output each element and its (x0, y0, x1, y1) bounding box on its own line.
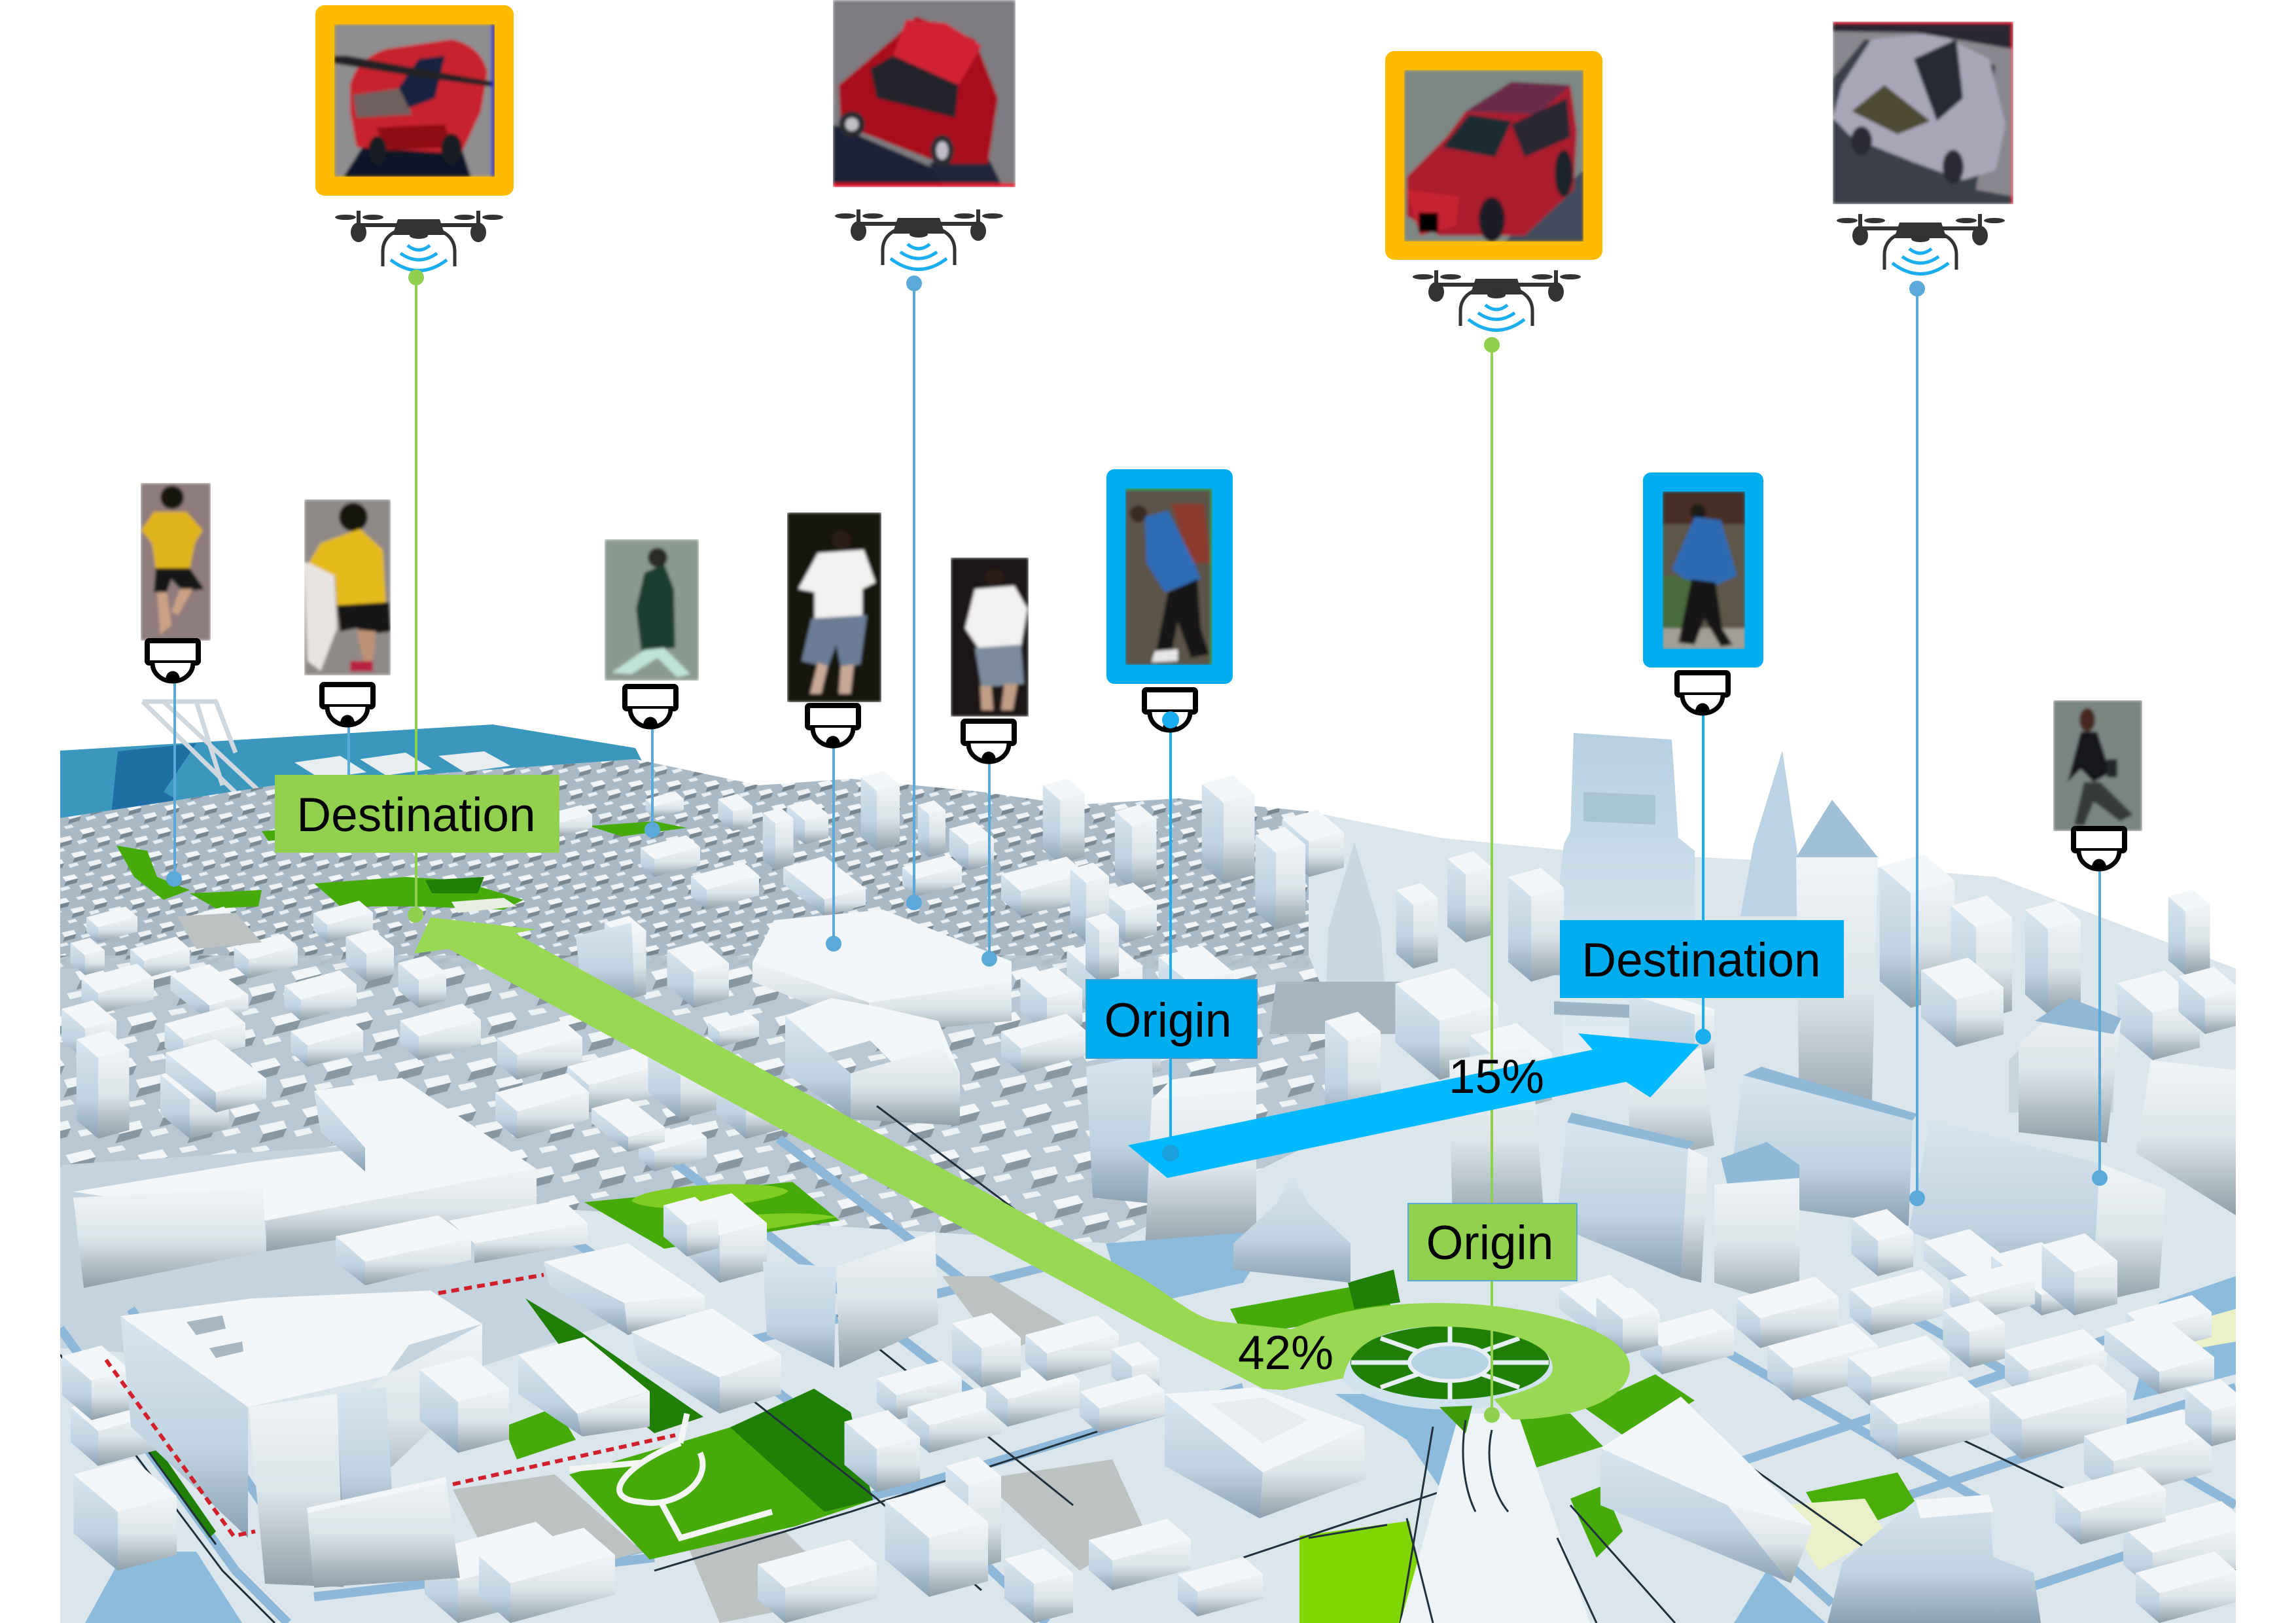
upper parks left (116, 821, 687, 910)
photo: pedestrian in black (2053, 700, 2142, 831)
map ground (60, 759, 2236, 1623)
arrow-shadow towers beneath blue arrow (1449, 1047, 1714, 1230)
piers (294, 751, 510, 775)
frame: amber (315, 5, 514, 196)
label: 42 percent: 42% (1238, 1327, 1333, 1380)
frame: blue (1106, 469, 1233, 684)
long near block (1600, 1397, 1813, 1583)
parking lots (177, 913, 1145, 1623)
photo: pedestrian dark coat (605, 539, 699, 681)
green parks (144, 1182, 2236, 1623)
label: origin (blue): Origin (1104, 994, 1231, 1047)
icon: camera (1144, 690, 1195, 730)
tall stepped tower right (2019, 998, 2121, 1143)
dome church (1233, 1174, 1351, 1283)
lower-left buildings (71, 1383, 190, 1466)
label: destination (green): Destination (296, 789, 536, 842)
tower block by the arrow (785, 998, 960, 1126)
frame: amber (1385, 51, 1602, 260)
near right towers (1828, 1495, 2041, 1623)
icon: drone (335, 211, 503, 271)
pyramid tower (1796, 800, 1878, 1126)
label: destination (blue) (1560, 920, 1844, 998)
mid block behind the green arrow (752, 910, 1012, 1034)
camera 4 with pedestrian in white shirt (787, 512, 881, 746)
icon: drone (1413, 270, 1581, 330)
photo: pedestrian blue jacket (1125, 488, 1212, 665)
towers in the centre (1086, 1054, 1256, 1250)
camera 1 with pedestrian in yellow shirt (141, 483, 211, 681)
label: origin (blue) (1086, 980, 1257, 1058)
icon: drone (1837, 214, 2005, 274)
drone 2 with red SUV (833, 0, 1016, 270)
far right block (2136, 1060, 2236, 1215)
camera 7 with highlighted pedestrian in blue jacket (1643, 473, 1763, 713)
right-side low blocks (1559, 1275, 1660, 1348)
mid boxes (518, 1337, 650, 1436)
camera 3 with pedestrian in dark coat (605, 539, 699, 727)
road outlines (60, 1106, 2236, 1623)
front tower cluster (1556, 1113, 1708, 1283)
photo: pedestrian blue jacket (1663, 491, 1745, 649)
photo: red crossover (1404, 70, 1583, 241)
label: origin (green): Origin (1426, 1217, 1553, 1270)
skyline tower with stepped top (1551, 733, 1695, 1060)
camera 6 with highlighted pedestrian in blue jacket (1106, 469, 1233, 730)
camera 2 with pedestrian in yellow shirt (304, 499, 391, 725)
diverging roads at plaza (1400, 1406, 1590, 1623)
near tall tower (249, 1387, 393, 1587)
camera link lines (175, 277, 2100, 1415)
frame: blue (1643, 473, 1763, 668)
icon: camera (963, 721, 1014, 762)
photo: pedestrian yellow shirt (304, 499, 391, 675)
near-field blue street shadows (60, 1139, 2236, 1623)
blue arrow: 15% flow (1128, 1033, 1699, 1178)
photo: pedestrian white shirt (951, 558, 1029, 717)
label: destination (blue): Destination (1581, 934, 1821, 987)
right-most slab tower (1909, 1120, 2166, 1303)
far city texture (60, 759, 1309, 969)
dome building (2009, 1041, 2113, 1113)
drone 4 with silver sedan (1833, 22, 2013, 274)
icon: drone (835, 209, 1003, 270)
label: destination (green) (275, 775, 559, 853)
drone link dots (408, 270, 1925, 353)
icon: camera (807, 705, 858, 746)
green arrow: 42% flow (414, 918, 1630, 1419)
drone 1 with highlighted red hatchback (315, 5, 514, 271)
icon: camera (625, 687, 676, 727)
big central-left mass (120, 1291, 482, 1538)
river water (60, 724, 642, 818)
photo: red hatchback (334, 24, 495, 177)
far buildings (559, 805, 592, 837)
photo: pedestrian white shirt (787, 512, 881, 702)
big towers right (1733, 1067, 1917, 1226)
photo: pedestrian yellow shirt (141, 483, 211, 641)
camera 5 with pedestrian in white shirt (951, 558, 1029, 762)
drone 3 with highlighted red crossover (1385, 51, 1602, 330)
east skyline towers (1880, 854, 1955, 1008)
block with shadow (544, 1243, 705, 1335)
icon: camera (147, 641, 198, 681)
bridge (141, 699, 259, 792)
city map (60, 702, 2251, 1623)
label: origin (green) (1408, 1204, 1577, 1281)
camera 8 with pedestrian in black (2053, 700, 2142, 869)
medium blocks (639, 1124, 707, 1171)
city hall tower (1269, 842, 1446, 1034)
icon: camera (322, 685, 373, 725)
large L-shaped block (73, 1078, 537, 1288)
icon: camera (1677, 673, 1728, 713)
central west tower (576, 923, 635, 1001)
anchor dots on the map (166, 822, 2108, 1423)
ground shadows (85, 1230, 2236, 1623)
small red dashed route (106, 1275, 675, 1536)
row housing below the arrow (877, 1361, 962, 1420)
spire tower (1740, 751, 1806, 916)
photo: silver sedan (1833, 22, 2013, 204)
circular plaza (1333, 1315, 1566, 1410)
photo: red SUV (833, 0, 1016, 187)
triangular white tower (763, 1231, 938, 1368)
label: 15 percent: 15% (1449, 1050, 1544, 1103)
dot (1162, 711, 1179, 728)
corner block near park (1165, 1387, 1366, 1518)
stepped near tower (1714, 1142, 1799, 1309)
icon: camera (2074, 829, 2125, 869)
